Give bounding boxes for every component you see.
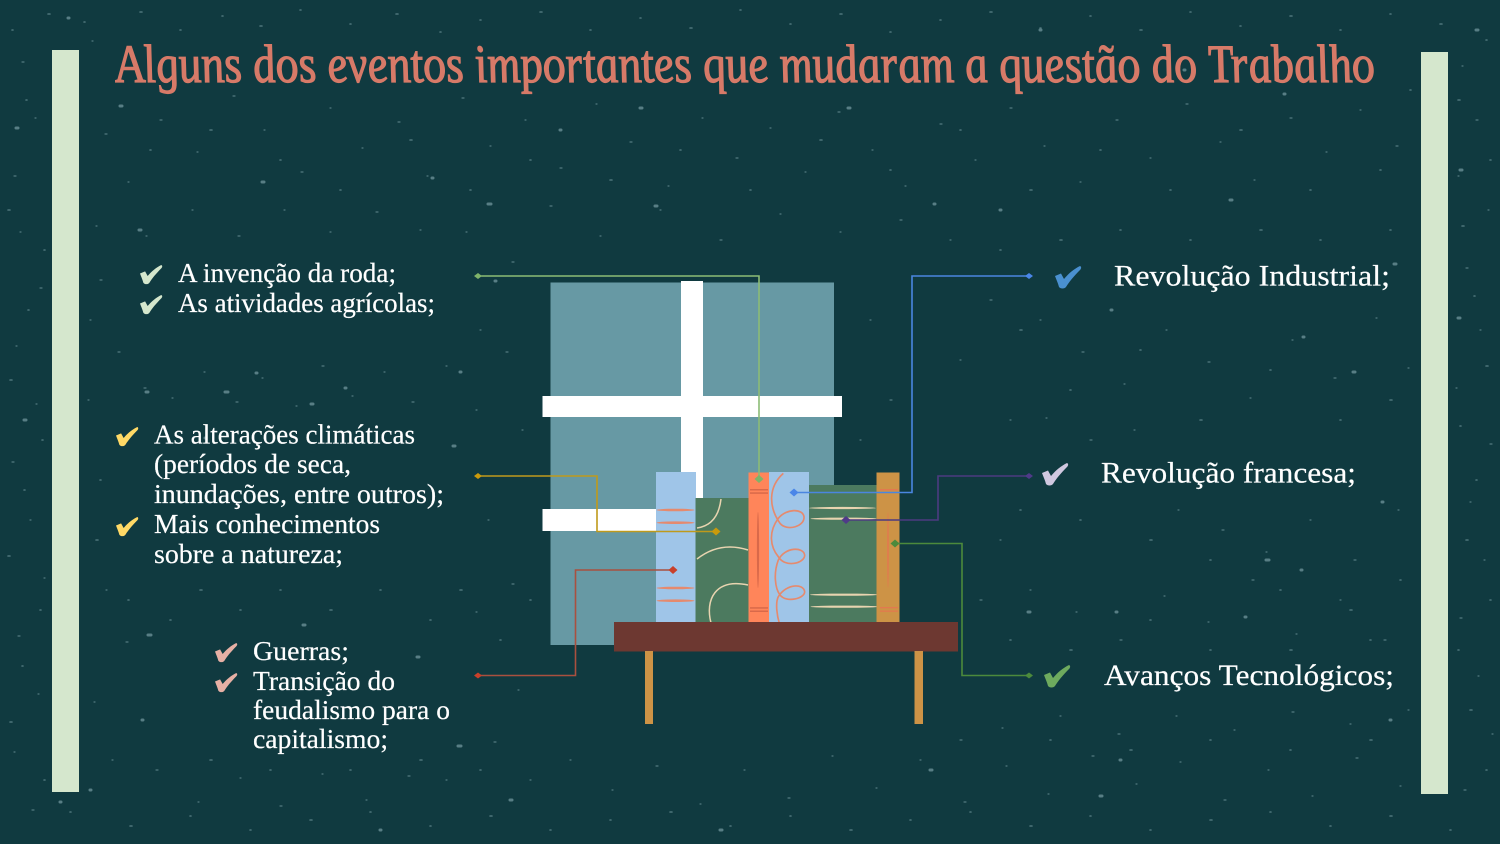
connector: yellow to middle-left text xyxy=(474,473,720,536)
text block: wars and feudalism xyxy=(215,635,450,754)
icon: check pink 2 xyxy=(215,673,237,692)
label: Revolução francesa: Revolução francesa; xyxy=(1101,456,1356,490)
connector: dark green to Avanços Tecnológicos xyxy=(890,540,1033,678)
label: Avanços Tecnológicos: Avanços Tecnológicos; xyxy=(1104,659,1394,692)
line: transição: Transição do xyxy=(253,665,395,696)
line: feudalismo: feudalismo para o xyxy=(253,694,450,725)
text block: climate and nature xyxy=(116,418,444,569)
text block: Revolução francesa xyxy=(1042,456,1356,490)
shelf leg right xyxy=(914,651,923,724)
line: agrícolas: As atividades agrícolas; xyxy=(178,287,435,318)
text block: Revolução Industrial xyxy=(1055,260,1390,292)
shelf leg left xyxy=(645,651,653,724)
line: períodos: (períodos de seca, xyxy=(154,448,351,479)
line: capitalismo: capitalismo; xyxy=(253,723,388,754)
book: green with arcs xyxy=(696,498,748,623)
icon: check yellow 1 xyxy=(116,427,138,446)
icon: check light green 2 xyxy=(140,295,162,314)
line: inundações: inundações, entre outros); xyxy=(154,478,444,509)
window frame xyxy=(542,281,842,531)
icon: check pink 1 xyxy=(215,643,237,662)
icon: check yellow 2 xyxy=(116,517,138,536)
line: roda: A invenção da roda; xyxy=(178,257,396,288)
book: orange spine xyxy=(748,472,769,622)
line: conhecimentos: Mais conhecimentos xyxy=(154,508,380,539)
book: wide green xyxy=(809,485,879,622)
line: natureza: sobre a natureza; xyxy=(154,538,343,569)
window pane xyxy=(550,282,834,645)
book: tan spine xyxy=(876,472,900,622)
right vertical bar xyxy=(1421,52,1448,794)
shelf top xyxy=(614,622,958,652)
icon: check blue xyxy=(1055,266,1081,288)
icon: check green xyxy=(1044,665,1070,688)
illustration: window, books and shelf xyxy=(542,281,958,724)
book: blue with curls xyxy=(769,472,809,623)
connector: blue to Revolução Industrial xyxy=(790,273,1033,496)
connector: red to bottom-left text xyxy=(474,566,678,678)
connector: green to top-left text xyxy=(474,273,764,483)
line: guerras: Guerras; xyxy=(253,635,349,666)
connector: purple to Revolução francesa xyxy=(842,473,1033,524)
text block: wheel and agriculture xyxy=(140,257,435,318)
line: alterações: As alterações climáticas xyxy=(154,418,415,450)
label: Revolução Industrial: Revolução Industrial; xyxy=(1114,260,1390,292)
icon: check light green 1 xyxy=(140,265,162,284)
left vertical bar xyxy=(52,50,79,792)
book: tall blue left xyxy=(656,472,696,622)
text block: Avanços Tecnológicos xyxy=(1044,659,1394,692)
icon: check lilac xyxy=(1042,463,1068,486)
